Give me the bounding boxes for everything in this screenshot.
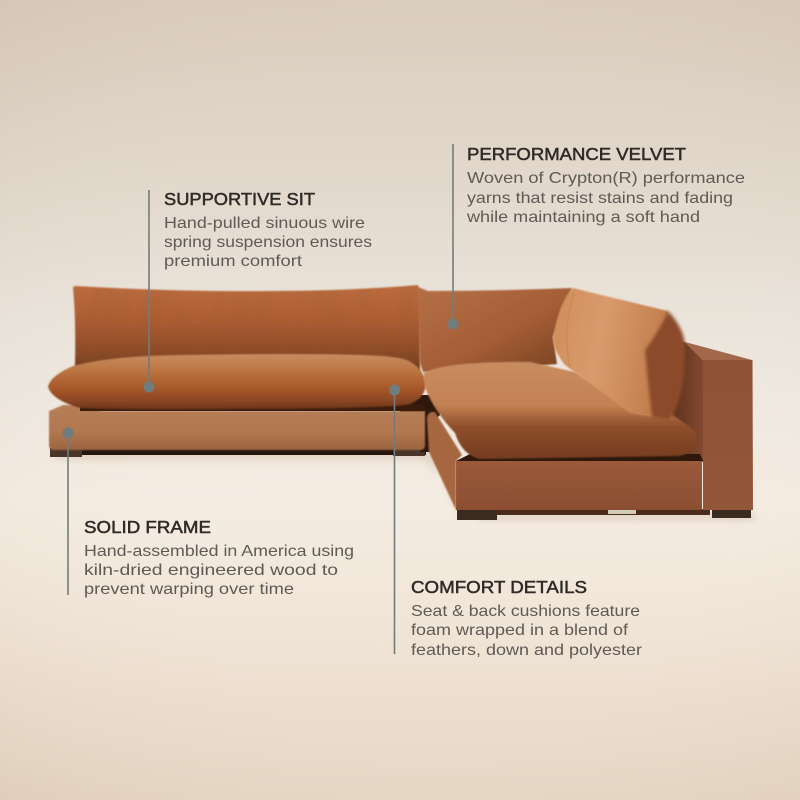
description [84, 543, 354, 598]
description [164, 215, 372, 270]
arm [655, 335, 753, 510]
sofa [48, 285, 755, 520]
right section base [427, 412, 703, 510]
description: Woven of Crypton(R) performance [467, 170, 745, 187]
callout: supportive sit [144, 189, 372, 392]
description [411, 603, 643, 659]
leader line [448, 144, 458, 330]
callout: solid frame [62, 428, 354, 598]
heading: SOLID FRAME [84, 517, 211, 537]
description: prevent warping over time [84, 581, 294, 598]
right section legs [457, 509, 751, 520]
heading: PERFORMANCE VELVET [467, 144, 686, 164]
leader line [389, 384, 400, 654]
heading: SUPPORTIVE SIT [164, 189, 315, 209]
description: foam wrapped in a blend of [411, 622, 629, 639]
left seat shadow [80, 404, 424, 411]
leader line [62, 428, 74, 595]
description: premium comfort [164, 253, 303, 270]
left seat cushion [48, 354, 426, 409]
leader line [144, 190, 154, 392]
description: Hand-pulled sinuous wire [164, 215, 365, 232]
right seat cushion [424, 362, 697, 459]
description: feathers, down and polyester [411, 642, 643, 659]
floor shadow [55, 452, 755, 520]
description: Seat & back cushions feature [411, 603, 640, 620]
description: kiln-dried engineered wood to [84, 562, 338, 579]
right back cushion [553, 288, 685, 420]
gap shadow between sections [400, 395, 440, 452]
under left section [50, 448, 426, 457]
left section base [49, 405, 425, 450]
description [466, 170, 745, 226]
description: while maintaining a soft hand [466, 209, 700, 226]
description: yarns that resist stains and fading [467, 190, 733, 207]
left back cushion [73, 285, 420, 372]
description: Hand-assembled in America using [84, 543, 354, 560]
callout: comfort details [389, 384, 643, 659]
centre back cushion [418, 287, 572, 372]
heading: COMFORT DETAILS [411, 577, 587, 597]
description: spring suspension ensures [164, 234, 372, 251]
callout: performance velvet [448, 144, 745, 330]
